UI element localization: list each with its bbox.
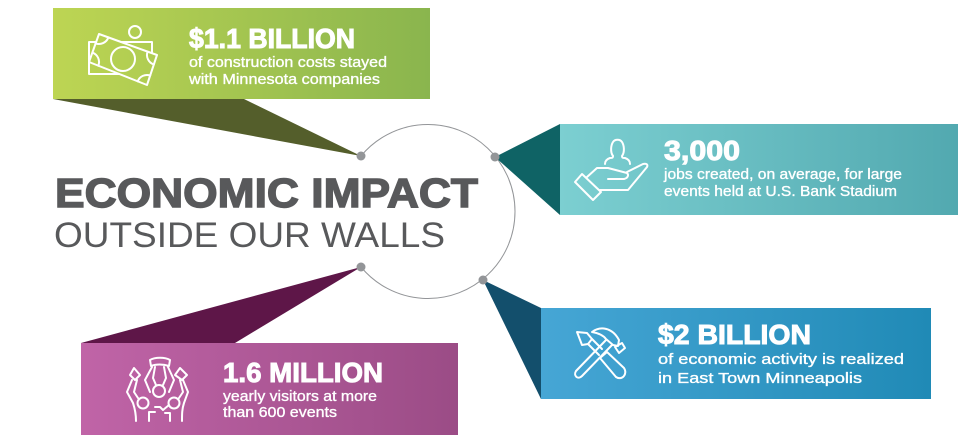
description: jobs created: jobs created, on average, for large [663, 166, 902, 183]
title: ECONOMIC IMPACT [55, 170, 478, 216]
stat: 3,000: 3,000 [664, 135, 740, 166]
description: jobs created [663, 166, 902, 200]
panel: yearly visitors [81, 343, 458, 435]
description: economic activity [658, 351, 904, 387]
icon: hand holding person [575, 140, 647, 200]
description: yearly visitors: than 600 events [223, 404, 337, 421]
icon: money bills [89, 26, 157, 85]
description: yearly visitors: yearly visitors at more [223, 388, 377, 405]
title: OUTSIDE OUR WALLS [54, 216, 445, 255]
pointer: green panel to circle [53, 99, 361, 156]
pointer: blue panel to circle [483, 280, 541, 399]
stat: 1.6 million: 1.6 MILLION [223, 357, 383, 388]
description: jobs created: events held at U.S. Bank Stadium [664, 183, 897, 200]
description: economic activity: in East Town Minneapolis [658, 370, 862, 387]
description: construction costs: with Minnesota companies [188, 71, 380, 88]
panel: economic activity [541, 308, 931, 399]
description: economic activity: of economic activity is realized [658, 351, 904, 368]
connector dots [356, 152, 500, 284]
title [54, 170, 478, 255]
central circle arc [361, 125, 515, 299]
pointer: teal panel to circle [495, 124, 560, 215]
description: construction costs [188, 54, 387, 88]
stat: $1.1 billion: $1.1 BILLION [189, 23, 355, 54]
icon: hammer and tool [575, 328, 625, 378]
panel: construction costs [53, 8, 430, 99]
description: yearly visitors [223, 388, 377, 421]
panel: jobs created [560, 124, 958, 215]
icon: cheering crowd [127, 358, 188, 421]
stat: $2 billion: $2 BILLION [658, 319, 811, 350]
pointer: purple panel to circle [81, 267, 361, 343]
description: construction costs: of construction costs stayed [189, 54, 387, 71]
